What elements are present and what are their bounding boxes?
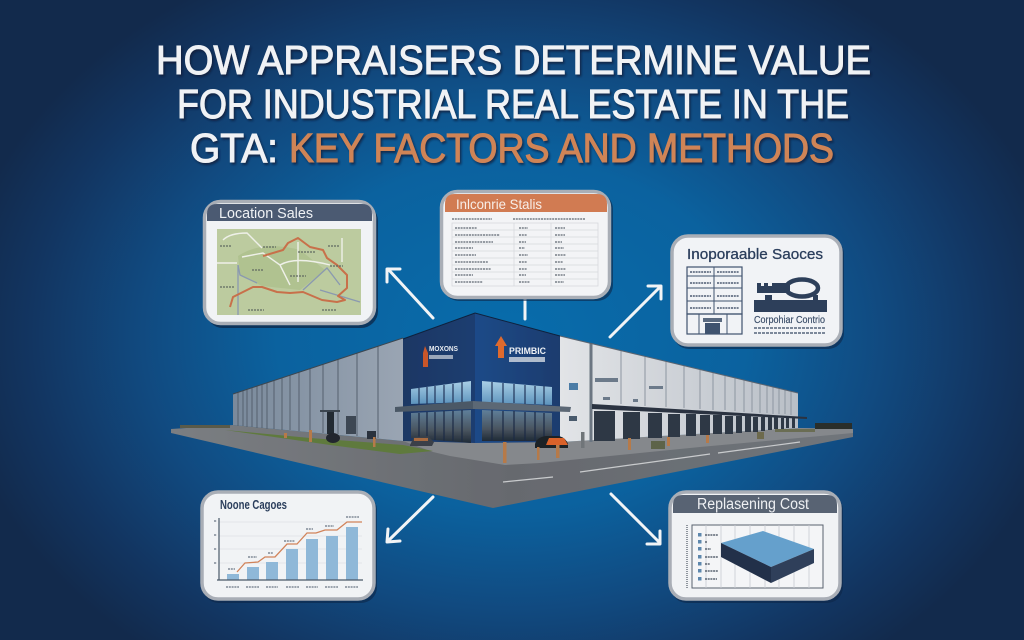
panel: income chart [202, 492, 377, 603]
panel: replacement cost [670, 492, 843, 603]
arrow: to income chart [387, 497, 433, 542]
chart legend [698, 533, 718, 580]
panel header [445, 194, 607, 212]
bar chart [214, 517, 363, 587]
navy entrance block [395, 313, 571, 443]
title: FOR INDUSTRIAL REAL ESTATE IN THE [177, 81, 849, 127]
panel: comparable sales [672, 236, 844, 349]
arrow: connector to income stats [524, 298, 526, 319]
panel header: Replasening Cost [697, 496, 810, 513]
key caption: Corpohiar Contrio [754, 314, 825, 326]
panel header [207, 204, 372, 222]
title: GTA: [190, 125, 278, 171]
ground plane [171, 425, 853, 508]
income table [452, 219, 598, 286]
sign: right face: PRIMBIC [509, 346, 546, 356]
building and site [171, 313, 853, 508]
road dashes [503, 442, 800, 482]
title: HOW APPRAISERS DETERMINE VALUE [156, 37, 871, 83]
wing signage and small windows [569, 378, 663, 421]
panel header: Inlconrie Stalis [456, 196, 542, 212]
upper windows [411, 381, 471, 404]
title [156, 37, 871, 171]
right wing [560, 336, 807, 442]
panel heading: Inoporaable Saoces [687, 246, 823, 263]
sign: right face [495, 336, 546, 362]
canopy [395, 401, 473, 412]
key caption [754, 314, 825, 333]
panel heading: Noone Cagoes [220, 497, 287, 512]
left wing [233, 338, 403, 441]
arrow: to income approach panel [610, 286, 661, 337]
title: KEY FACTORS AND METHODS [289, 125, 834, 171]
lower windows [411, 410, 471, 443]
vehicles and bollards [180, 423, 852, 463]
icon: key on base [754, 280, 827, 312]
arrow: to location sales [387, 269, 433, 318]
dock canopy [592, 404, 807, 419]
comparison table [687, 267, 742, 334]
panel: income stats [442, 192, 613, 301]
sign: left face: MOXONS [429, 346, 458, 353]
map [217, 229, 361, 315]
sidewalk [403, 428, 853, 465]
3D slab [721, 531, 814, 583]
arrow: to replacement cost [611, 494, 660, 544]
panel header: Location Sales [219, 206, 313, 222]
panel: location sales [204, 202, 378, 328]
dock doors [594, 411, 795, 441]
sign: left face [423, 346, 458, 367]
cost chart frame [687, 525, 823, 588]
grass strip [225, 430, 433, 454]
